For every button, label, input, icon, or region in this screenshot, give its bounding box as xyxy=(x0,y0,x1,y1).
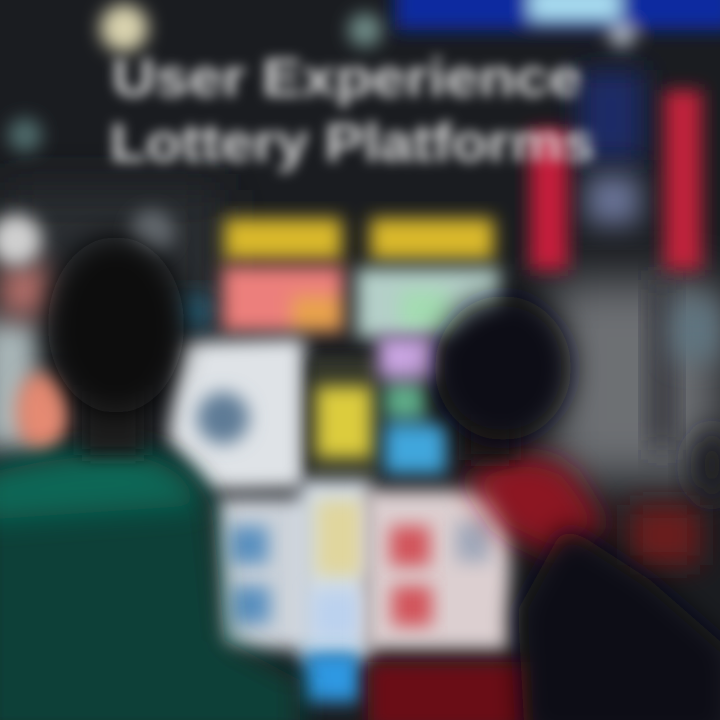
lower middle panel xyxy=(300,480,370,702)
red banner right xyxy=(664,90,702,270)
yellow header right xyxy=(370,218,494,260)
backpack xyxy=(518,525,720,720)
hanging banners xyxy=(530,70,702,270)
distant red xyxy=(630,505,700,565)
title: User Experience xyxy=(112,48,582,108)
lower red panel xyxy=(364,490,510,650)
salmon panel xyxy=(222,266,344,332)
lower left panel xyxy=(216,498,316,650)
person left xyxy=(0,237,300,720)
title xyxy=(110,48,595,173)
title: Lottery Platforms xyxy=(110,113,595,173)
head xyxy=(48,237,184,413)
lower shirt xyxy=(368,662,533,720)
neck xyxy=(82,385,144,455)
neck xyxy=(465,420,515,460)
body xyxy=(0,450,300,720)
panel: display wall xyxy=(168,218,510,702)
ceiling blue light xyxy=(395,0,720,48)
ceiling lights xyxy=(0,4,382,266)
red shirt xyxy=(465,457,605,560)
background person glimpse xyxy=(690,429,720,501)
centre banner xyxy=(578,70,644,160)
person right xyxy=(368,296,720,720)
head xyxy=(435,296,571,440)
red banner left xyxy=(530,130,568,270)
white panel with circle icon xyxy=(168,338,304,490)
phone xyxy=(310,356,378,482)
side poster xyxy=(16,372,68,452)
pale green panel xyxy=(356,268,500,338)
colour tiles xyxy=(378,336,446,474)
yellow header left xyxy=(224,218,342,260)
